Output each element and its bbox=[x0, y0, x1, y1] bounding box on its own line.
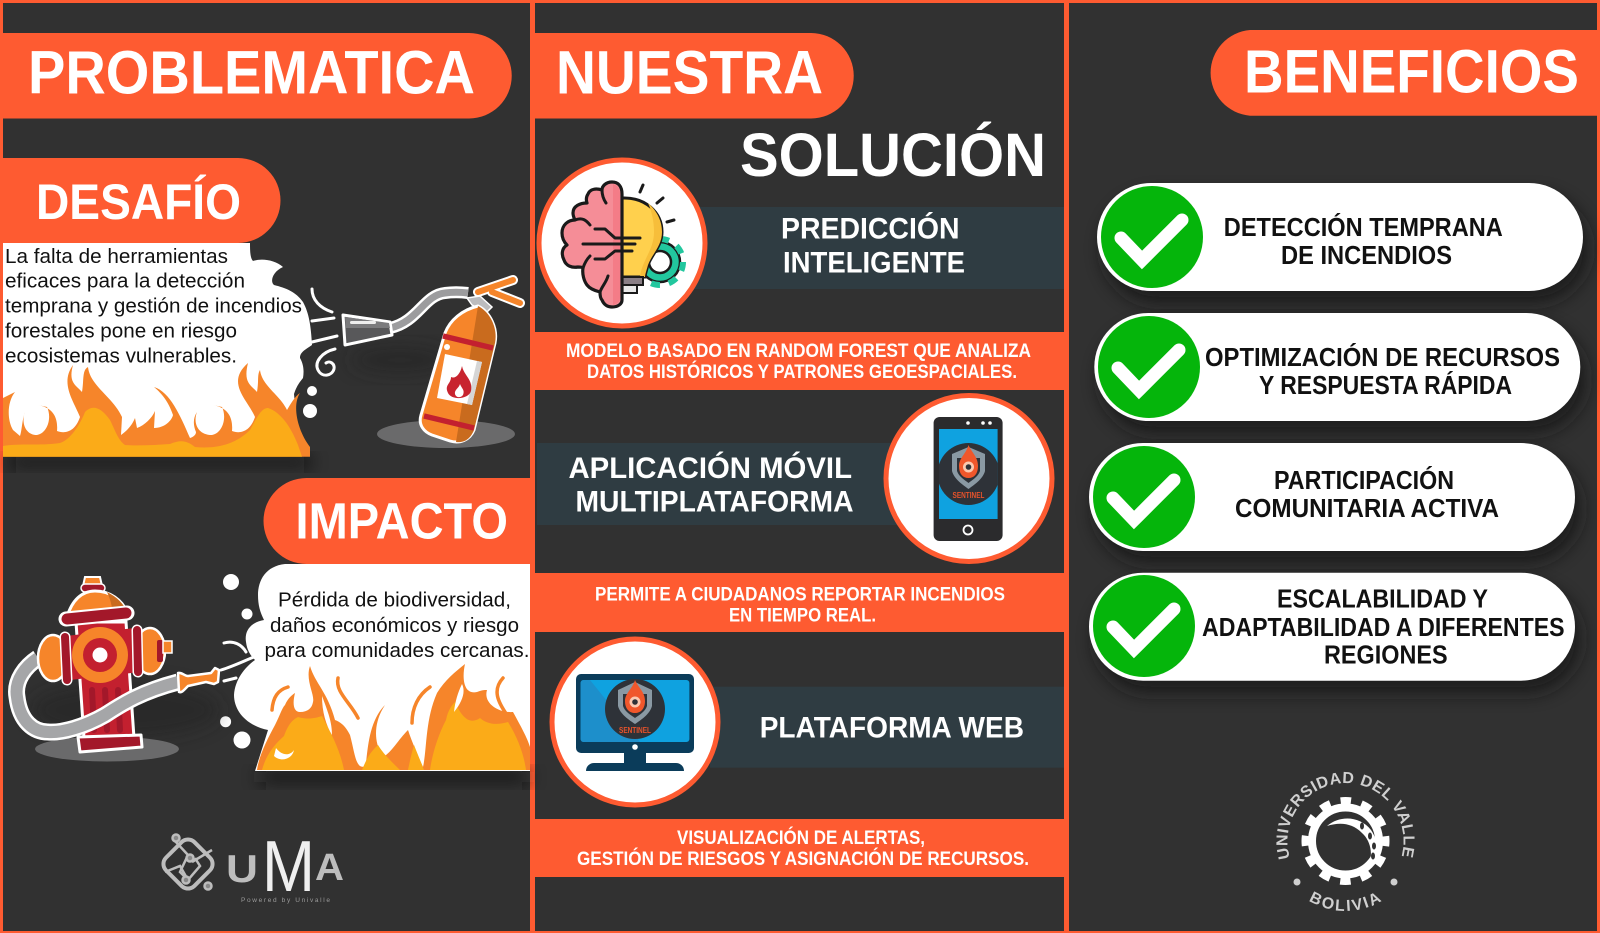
callout: plataforma description bbox=[535, 819, 1064, 877]
band: aplicacion movil: MULTIPLATAFORMA bbox=[576, 486, 854, 519]
icon: mobile phone with sentinel app bbox=[886, 396, 1052, 562]
section: prediccion inteligente bbox=[535, 160, 1064, 390]
text: impact description bbox=[264, 590, 530, 662]
icon: desktop monitor with sentinel dashboard bbox=[552, 639, 718, 805]
benefit: escalabilidad bbox=[1089, 573, 1581, 693]
text: UMA wordmark: U bbox=[226, 848, 258, 891]
panel: problematica bbox=[0, 33, 530, 907]
text: challenge description: La falta de herramientas bbox=[5, 246, 228, 268]
icon: brain and light bulb bbox=[539, 160, 705, 326]
text: bolivia: BOLIVIA bbox=[1309, 891, 1382, 911]
logo: UMA bbox=[160, 827, 344, 907]
text: challenge description: forestales pone en riesgo bbox=[5, 320, 237, 342]
icon: desktop monitor with sentinel dashboard: SENTINEL bbox=[619, 725, 651, 735]
callout: plataforma description: VISUALIZACIÓN DE ALERTAS, bbox=[677, 827, 925, 849]
text: challenge description bbox=[5, 246, 302, 368]
benefit: optimizacion de recursos bbox=[1094, 313, 1586, 433]
icon: fire hydrant with hose bbox=[17, 577, 220, 762]
heading: desafio bbox=[0, 158, 280, 243]
band: plataforma web: PLATAFORMA WEB bbox=[760, 712, 1024, 745]
icon: dots bbox=[1294, 878, 1398, 886]
benefit: optimizacion de recursos: OPTIMIZACIÓN DE RECURSOS bbox=[1205, 342, 1560, 372]
benefit: deteccion temprana: DETECCIÓN TEMPRANA bbox=[1224, 212, 1503, 242]
band: plataforma web bbox=[710, 687, 1064, 768]
title: solucion: SOLUCIÓN bbox=[740, 121, 1046, 189]
benefit: deteccion temprana: DE INCENDIOS bbox=[1281, 242, 1452, 270]
panel: nuestra solucion bbox=[535, 33, 1064, 877]
illustration: white smoke cloud and flames of impact bbox=[220, 564, 530, 784]
title: problematica: PROBLEMATICA bbox=[28, 38, 475, 106]
band: prediccion inteligente bbox=[690, 207, 1064, 289]
band: prediccion inteligente: PREDICCIÓN bbox=[781, 212, 960, 246]
text: challenge description: eficaces para la detección bbox=[5, 270, 245, 292]
icon: mobile phone with sentinel app: SENTINEL bbox=[952, 490, 984, 500]
section: plataforma web bbox=[535, 639, 1064, 877]
text: UMA wordmark middle letter: M bbox=[262, 827, 315, 907]
text: challenge description: ecosistemas vulnerables. bbox=[5, 346, 237, 368]
callout: prediccion description bbox=[535, 332, 1064, 390]
illustration: white smoke cloud and flames of challenge bbox=[3, 243, 337, 468]
benefit: escalabilidad: ESCALABILIDAD Y bbox=[1277, 586, 1488, 614]
logo: universidad del valle bbox=[1276, 772, 1415, 911]
band: aplicacion movil: APLICACIÓN MÓVIL bbox=[568, 451, 852, 485]
heading: desafio: DESAFÍO bbox=[36, 174, 241, 230]
text: impact description: para comunidades cercanas. bbox=[264, 640, 530, 662]
callout: aplicacion description bbox=[535, 573, 1064, 632]
benefit: optimizacion de recursos: Y RESPUESTA RÁPIDA bbox=[1259, 371, 1512, 400]
benefit: deteccion temprana bbox=[1097, 183, 1589, 303]
text: challenge description: temprana y gestión de incendios bbox=[5, 296, 302, 318]
callout: aplicacion description: PERMITE A CIUDADANOS REPORTAR INCENDIOS bbox=[595, 585, 1005, 606]
benefit: participacion comunitaria: COMUNITARIA ACTIVA bbox=[1235, 495, 1499, 523]
callout: prediccion description: MODELO BASADO EN RANDOM FOREST QUE ANALIZA bbox=[566, 341, 1031, 362]
text: impact description: daños económicos y riesgo bbox=[270, 615, 519, 637]
band: aplicacion movil bbox=[537, 443, 907, 525]
section: aplicacion movil bbox=[535, 396, 1064, 632]
text: impact description: Pérdida de biodiversidad, bbox=[278, 590, 511, 612]
title: nuestra: NUESTRA bbox=[556, 38, 823, 106]
icon: gear with wheat bbox=[1305, 800, 1386, 882]
heading: impacto: IMPACTO bbox=[296, 492, 508, 550]
callout: plataforma description: GESTIÓN DE RIESGOS Y ASIGNACIÓN DE RECURSOS. bbox=[577, 848, 1029, 870]
text: powered by: Powered by Univalle bbox=[241, 897, 330, 904]
benefit: escalabilidad: ADAPTABILIDAD A DIFERENTES bbox=[1202, 614, 1565, 642]
benefit: escalabilidad: REGIONES bbox=[1324, 642, 1448, 670]
icon: fire extinguisher bbox=[343, 280, 520, 448]
benefit: participacion comunitaria: PARTICIPACIÓN bbox=[1274, 465, 1454, 495]
icon: UMA circuit diamond bbox=[160, 834, 216, 892]
band: prediccion inteligente: INTELIGENTE bbox=[783, 246, 965, 280]
heading: impacto bbox=[264, 478, 530, 564]
benefit: participacion comunitaria bbox=[1089, 443, 1581, 563]
callout: aplicacion description: EN TIEMPO REAL. bbox=[729, 606, 876, 627]
text: UMA wordmark last letter: A bbox=[315, 847, 344, 889]
text: university name: UNIVERSIDAD DEL VALLE bbox=[1276, 772, 1415, 860]
callout: prediccion description: DATOS HISTÓRICOS Y PATRONES GEOESPACIALES. bbox=[587, 361, 1017, 383]
panel: beneficios bbox=[1088, 30, 1600, 911]
